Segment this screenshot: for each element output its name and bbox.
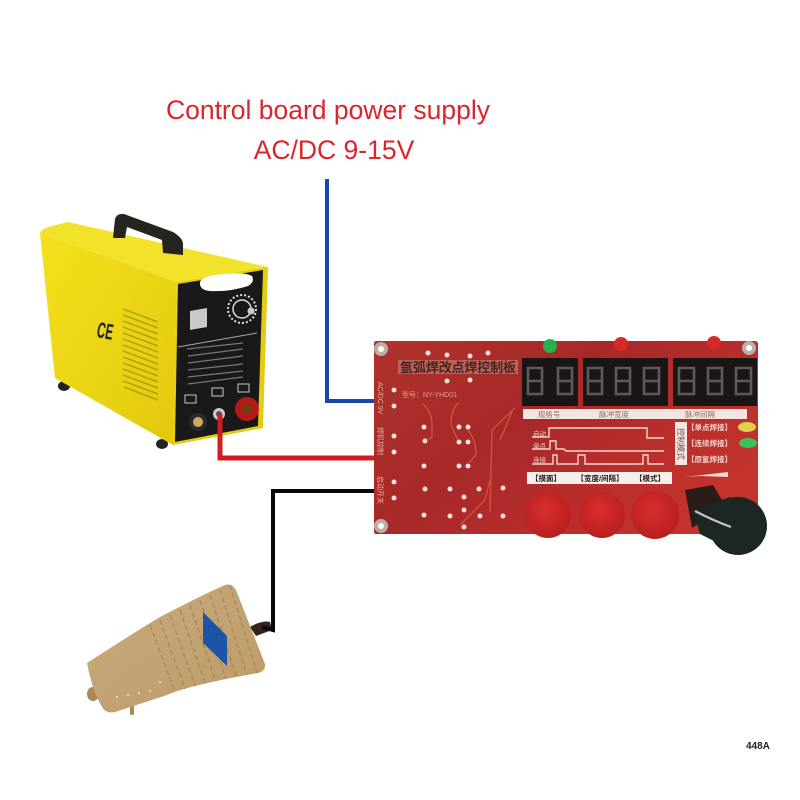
wire: blue power — [327, 179, 374, 401]
seven-segment displays — [522, 358, 757, 406]
icon: control board: 【原氩焊接】 — [687, 454, 732, 464]
icon: control board: 单点 — [533, 441, 546, 450]
icon: control board: 启动 — [533, 429, 546, 438]
icon: control board: 氩弧焊改点焊控制板 — [400, 360, 516, 375]
icon: welding machine — [40, 214, 268, 449]
icon: control board: 脉冲宽度 — [599, 409, 629, 419]
LEDs — [543, 339, 557, 353]
display labels — [523, 409, 747, 419]
icon: control board — [374, 336, 767, 555]
button labels — [527, 472, 672, 484]
icon: power switch — [190, 308, 207, 330]
mode panel — [675, 422, 687, 465]
white label patch — [200, 273, 253, 291]
icon: control board: 规格号 — [538, 409, 560, 419]
mounting holes — [376, 343, 754, 531]
label: product code: 448A — [746, 741, 770, 752]
side labels: 启动开关 — [376, 476, 385, 504]
timing diagram — [532, 428, 664, 464]
side labels: AC/DC 9V — [376, 382, 383, 415]
icon: control board: 控制模式 — [676, 428, 686, 460]
icon: dial — [228, 295, 256, 323]
pedal blue badge — [203, 612, 227, 666]
vent lines — [187, 343, 243, 384]
icon: control board: 【单点焊接】 — [687, 422, 732, 432]
welder handle — [113, 214, 183, 255]
title: control board power supply — [166, 95, 491, 165]
rotary knob — [685, 485, 725, 528]
pedal light dots — [116, 681, 161, 698]
title: control board power supply: AC/DC 9-15V — [254, 135, 415, 165]
connectors — [189, 413, 207, 431]
solder pads — [392, 350, 506, 530]
traces — [423, 403, 515, 525]
icon: control board: 连接 — [533, 455, 546, 464]
model number: 型号：NY-YHD01 — [402, 390, 457, 399]
CE mark: CE — [95, 317, 115, 345]
side labels: 焊机控制 — [376, 427, 385, 455]
icon: control board: 【模式】 — [635, 473, 665, 483]
board title — [398, 360, 518, 374]
icon: control board: 【连续焊接】 — [687, 438, 732, 448]
icon: foot pedal — [87, 585, 272, 715]
side labels — [376, 382, 385, 504]
icon: control board: 【摸面】 — [531, 473, 561, 483]
icon: control board: 【宽度/间隔】 — [576, 473, 624, 483]
wire: black foot switch — [262, 491, 374, 630]
red buttons — [525, 491, 679, 539]
wire: red welder signal — [220, 414, 374, 458]
title: control board power supply: Control board power supply — [166, 95, 491, 125]
side vents — [123, 309, 158, 400]
icon: control board: 脉冲间隔 — [685, 409, 715, 419]
